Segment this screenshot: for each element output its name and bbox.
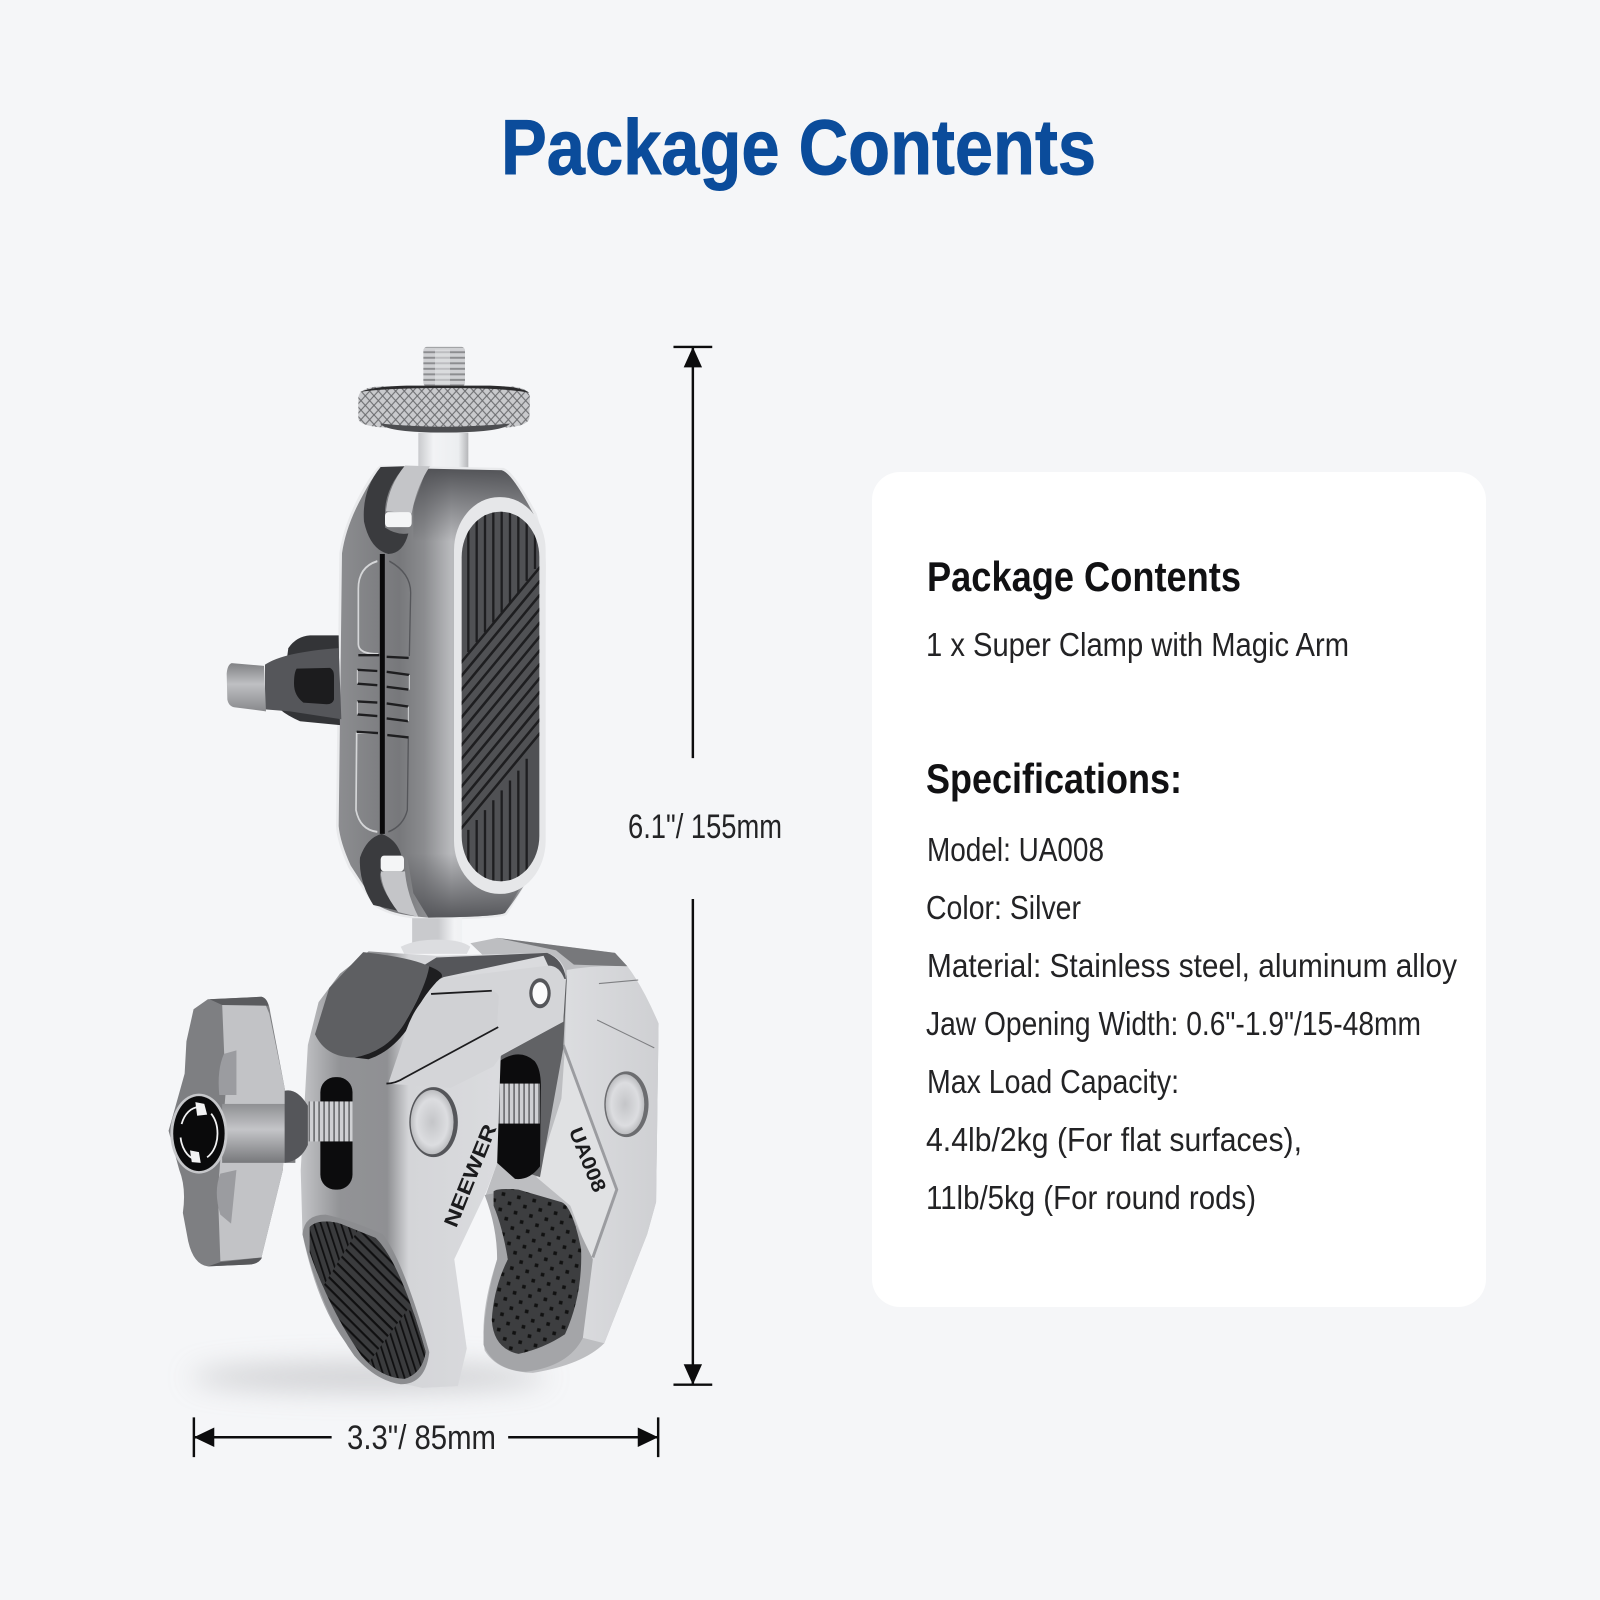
spec: flat surface load: 4.4lb/2kg (For flat surfaces), [926,1121,1302,1158]
spec: jaw opening: Jaw Opening Width: 0.6"-1.9"/15-48mm [926,1005,1421,1042]
arm neck [418,433,468,472]
left jaw body [301,951,566,1388]
ground shadow [190,1363,547,1391]
knob shaft [222,1104,295,1163]
lower ball joint opening [360,834,418,917]
spec: material: Material: Stainless steel, aluminum alloy [927,947,1457,984]
left screw thread [309,1101,352,1141]
width label: 3.3"/ 85mm [347,1419,496,1457]
right jaw [470,938,659,1373]
brand marking: NEEWER [440,1121,502,1230]
spec: color: Color: Silver [926,889,1081,926]
left jaw grip pad [301,1213,436,1388]
width dimension [194,1417,658,1457]
left jaw slot [320,1077,352,1190]
title: Package Contents [501,103,1096,191]
height dimension [673,347,712,1385]
clamp neck [401,918,470,954]
upper ball joint opening [364,465,430,554]
arm body [336,465,546,920]
spec: max load: Max Load Capacity: [927,1063,1179,1100]
grip recess top [315,952,429,1057]
knob end cap [170,1094,227,1174]
left jaw pivot button [409,1087,458,1157]
locking screw knob [169,997,352,1266]
mounting screw [423,347,465,386]
right jaw grip pad [484,1189,593,1372]
product: super clamp [169,918,659,1391]
height label: 6.1"/ 155mm [628,808,782,846]
model marking: UA008 [564,1124,610,1196]
right jaw slot with screw [497,1054,541,1179]
side locking knob [227,635,341,725]
product: magic arm [227,347,546,920]
pivot hole [529,978,551,1008]
heading: specifications: Specifications: [926,755,1182,802]
spec: model: Model: UA008 [927,831,1104,868]
grip pad [454,497,546,894]
right jaw pivot button [604,1071,649,1137]
knurled locking disk [358,386,530,433]
top plate [386,966,565,1088]
infographic canvas [168,117,1486,1458]
centre seam and panel details [356,554,411,834]
panel: specifications card [872,472,1486,1307]
package item: 1 x Super Clamp with Magic Arm [926,626,1349,663]
heading: package contents: Package Contents [927,553,1241,600]
spec: round rod load: 11lb/5kg (For round rods) [926,1179,1256,1216]
